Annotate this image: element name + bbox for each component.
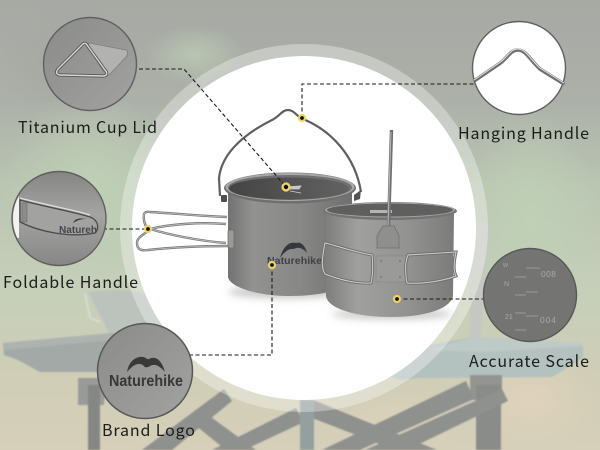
handle band <box>20 200 98 235</box>
label: Accurate Scale: Accurate Scale <box>469 348 589 372</box>
detail circle: foldable handle <box>12 172 106 266</box>
label: Foldable Handle: Foldable Handle <box>3 269 138 293</box>
right folding grip <box>406 252 456 283</box>
detail circle: brand logo <box>98 324 192 418</box>
label: Titanium Cup Lid: Titanium Cup Lid <box>18 114 157 138</box>
translucent ring <box>120 44 488 412</box>
upright handle <box>388 130 392 228</box>
detail circle: accurate scale <box>484 248 576 342</box>
product: large titanium pot <box>137 110 361 298</box>
hanging wire handle <box>219 110 361 196</box>
leader line: foldable handle <box>103 228 148 230</box>
detail circle: brand logo: Naturehike <box>109 373 183 390</box>
scale numbers: 004 <box>540 315 556 325</box>
icon: lid triangle plate <box>88 43 128 75</box>
leader line: cup lid <box>139 69 286 187</box>
label: Hanging Handle: Hanging Handle <box>458 120 589 144</box>
pot body <box>326 214 454 317</box>
product: small titanium pot <box>322 130 457 319</box>
centre plate <box>376 256 406 282</box>
scale numbers: 008 <box>541 269 556 279</box>
marker dot: cup lid <box>283 184 289 190</box>
icon: lid triangle ring <box>57 43 107 76</box>
icon: wire handle bend <box>474 50 564 84</box>
pot logo <box>267 243 322 267</box>
pot lid <box>224 172 356 204</box>
label: Brand Logo: Brand Logo <box>102 417 195 441</box>
hinge bracket <box>377 226 399 248</box>
handle logo: Natureh <box>59 225 97 236</box>
detail circle: titanium cup lid <box>44 18 136 110</box>
marker dot: brand logo <box>269 262 275 268</box>
folding handle <box>137 212 228 250</box>
marker dot: foldable handle <box>145 226 151 232</box>
pot logo: Naturehike <box>267 255 322 267</box>
marker dot: hanging handle <box>299 115 305 121</box>
scale numbers: N <box>504 281 509 288</box>
leader line: accurate scale <box>397 298 484 300</box>
background: camp table and pot <box>3 222 583 450</box>
leader line: hanging handle <box>302 84 566 118</box>
icon: Naturehike mountain logo <box>127 357 165 372</box>
pot lid <box>323 202 457 220</box>
white centre circle <box>132 56 476 400</box>
scale numbers: 21 <box>505 314 513 321</box>
detail circle: hanging handle <box>472 22 566 114</box>
scale numbers <box>502 262 556 325</box>
leader line: brand logo <box>190 265 272 355</box>
marker dot: accurate scale <box>394 296 400 302</box>
left folding grip <box>322 243 373 283</box>
pot body <box>228 192 352 296</box>
scale numbers: w <box>502 262 509 269</box>
scale tick marks <box>515 268 540 330</box>
